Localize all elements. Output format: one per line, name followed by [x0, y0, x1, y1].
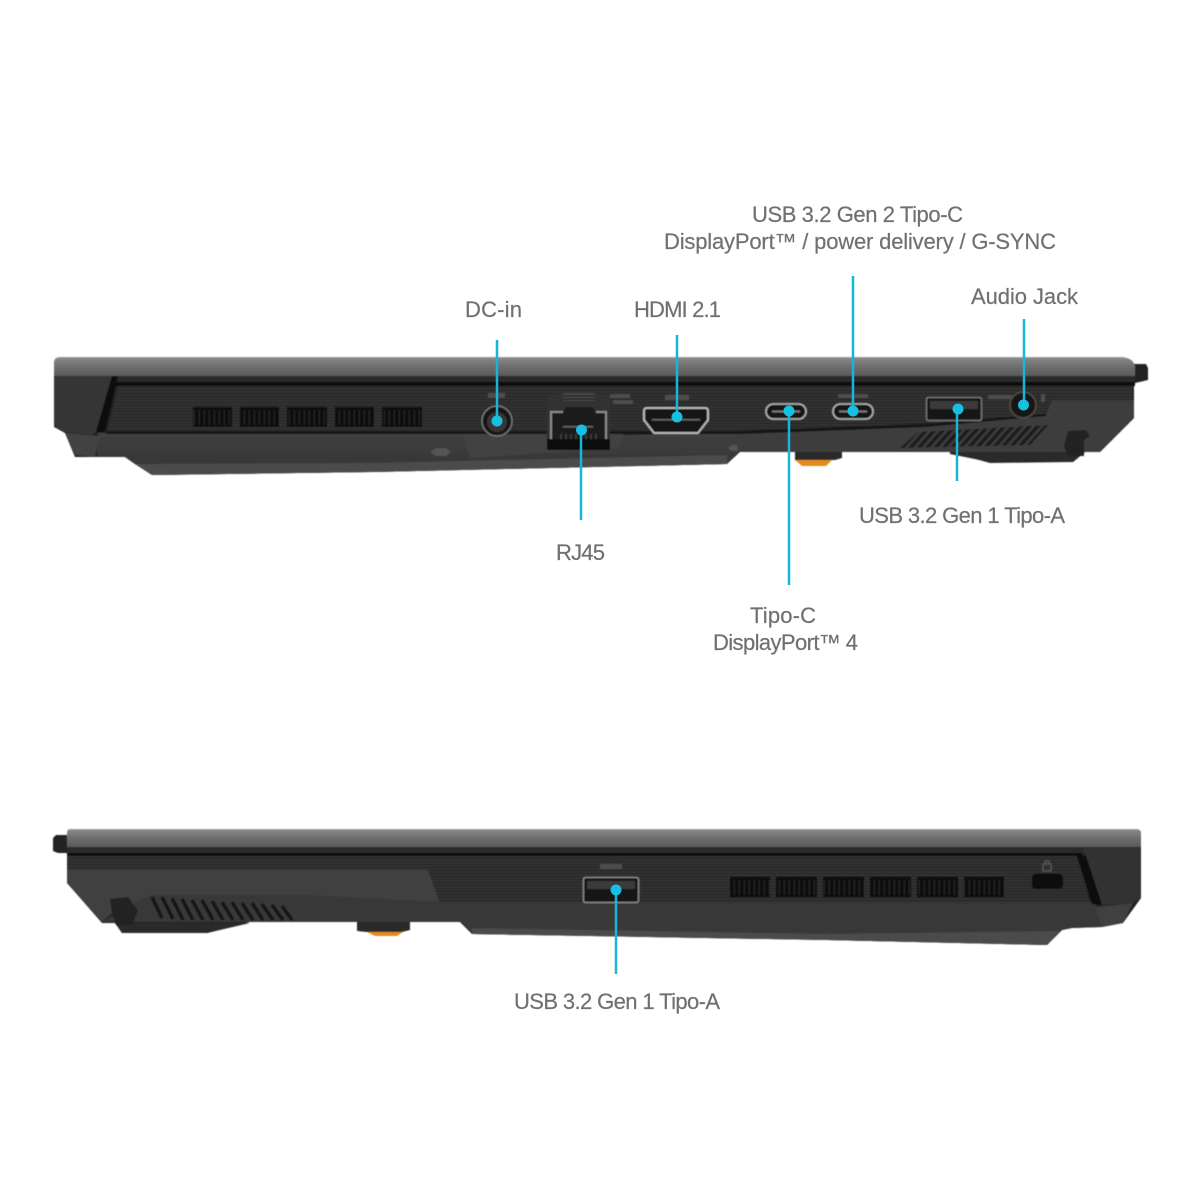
lower edge stripe: [135, 455, 727, 475]
label: USB-A top: USB 3.2 Gen 1 Tipo-A: [859, 503, 1065, 528]
lock icon: [1043, 861, 1051, 871]
grey left panel: [67, 870, 440, 922]
label: Audio Jack: Audio Jack: [971, 284, 1079, 309]
port: RJ45: [547, 392, 610, 450]
callout: DC-in: [492, 340, 502, 426]
panel lower shadow: [106, 414, 1046, 434]
callout: HDMI: [672, 335, 682, 422]
callout: USB-C right: [848, 276, 858, 416]
callout: USB-A top: [952, 404, 964, 481]
orange foot: [740, 452, 842, 460]
lower body shell: [54, 376, 1134, 475]
lock slot: [1032, 874, 1063, 889]
lower body shell: [67, 847, 1141, 945]
port: USB-A: [926, 398, 982, 420]
laptop: right side view (top): [54, 357, 1148, 475]
label: USB-A bottom: USB 3.2 Gen 1 Tipo-A: [514, 989, 720, 1014]
callout: RJ45: [576, 424, 587, 520]
lid: [67, 829, 1141, 847]
hinge band: [67, 847, 1141, 854]
lower grey body: [97, 433, 740, 475]
label: HDMI: HDMI 2.1: [634, 297, 721, 322]
ridged upper strip: [67, 856, 1087, 870]
callout: audio: [1018, 319, 1029, 410]
hinge band: [54, 376, 1135, 383]
label: DisplayPort power delivery G-SYNC: DisplayPort™ / power delivery / G-SYNC: [664, 229, 1056, 254]
hinge clip: [110, 897, 138, 925]
laptop: left side view (bottom): [53, 829, 1141, 945]
label: USB 3.2 Gen 2: USB 3.2 Gen 2 Tipo-C: [752, 202, 963, 227]
ridged port panel: [428, 870, 1090, 903]
port markings: [488, 393, 1045, 404]
right grey body: [735, 400, 1134, 452]
lower edge stripe: [472, 928, 1060, 945]
port: USB-C (right): [833, 404, 873, 419]
left hatch vent: [152, 897, 292, 920]
callout: USB-C left: [784, 406, 794, 585]
right hatch vent: [900, 425, 1048, 448]
rear latch: [53, 835, 67, 853]
small body bumps: [430, 445, 744, 456]
right foot: [950, 452, 1085, 463]
label: DisplayPort 4: DisplayPort™ 4: [713, 630, 858, 655]
raised port surround: [463, 434, 623, 458]
port: HDMI: [644, 408, 708, 433]
right corner cap: [1083, 848, 1141, 905]
label: Tipo-C: Tipo-C: [750, 603, 816, 628]
USB marking: [600, 864, 622, 869]
hinge clip: [1064, 430, 1090, 456]
ridged port panel: [107, 386, 1133, 432]
label: RJ45: RJ45: [556, 540, 605, 565]
port: USB-C (left): [766, 404, 806, 419]
left foot: [115, 923, 250, 933]
label: DC-in: DC-in: [465, 297, 522, 322]
exhaust vents: [193, 407, 422, 427]
lid: [54, 357, 1135, 376]
port: audio jack: [1010, 392, 1036, 418]
rear latch: [1130, 364, 1148, 383]
left corner cap: [54, 376, 112, 435]
exhaust vents: [730, 877, 1004, 897]
lower body: [102, 895, 1102, 945]
port: DC-in: [482, 406, 512, 436]
port: USB-A: [584, 878, 638, 902]
orange foot: [357, 922, 410, 932]
callout: USB-A bottom: [610, 884, 622, 974]
